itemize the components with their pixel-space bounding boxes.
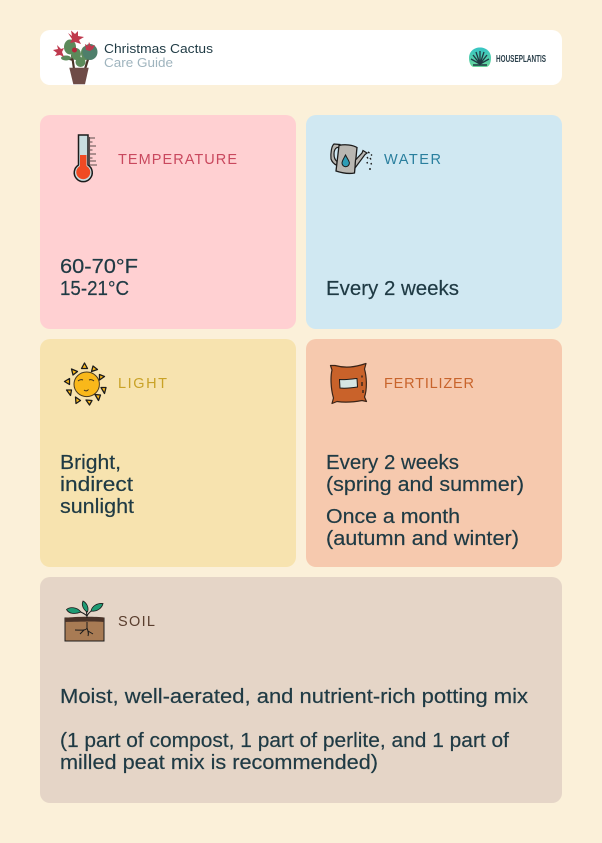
icon: watering can xyxy=(331,144,372,173)
heading: soil: SOIL xyxy=(118,614,155,630)
text: fertilizing schedule: (spring and summer) xyxy=(326,474,524,496)
header bar xyxy=(40,30,562,85)
text: light needs xyxy=(60,452,134,518)
title: Christmas Cactus xyxy=(104,41,214,56)
text: fertilizing schedule: Every 2 weeks xyxy=(326,452,459,474)
panel: light xyxy=(40,339,296,567)
icon: thermometer xyxy=(74,135,97,182)
heading: light: LIGHT xyxy=(118,376,167,392)
heading: water: WATER xyxy=(384,152,441,168)
text: light needs: indirect xyxy=(60,474,133,496)
text: soil mix: Moist, well-aerated, and nutrient-rich potting mix xyxy=(60,686,528,708)
text: soil mix xyxy=(60,686,528,774)
panel: soil xyxy=(40,577,562,803)
icon: christmas cactus in pot xyxy=(53,30,98,84)
text: soil mix: milled peat mix is recommended) xyxy=(60,752,378,774)
icon: sun xyxy=(64,363,106,405)
text: watering frequency: Every 2 weeks xyxy=(326,278,459,300)
text: fertilizing schedule xyxy=(326,452,524,550)
text: light needs: Bright, xyxy=(60,452,121,474)
text: fertilizing schedule: Once a month xyxy=(326,506,460,528)
subtitle: Care Guide xyxy=(104,55,173,70)
text: light needs: sunlight xyxy=(60,496,134,518)
panel: fertilizer xyxy=(306,339,562,567)
heading: fertilizer: FERTILIZER xyxy=(384,376,474,392)
text: temperature range xyxy=(60,256,138,300)
icon: seedling in soil xyxy=(65,601,104,641)
text: soil mix: (1 part of compost, 1 part of perlite, and 1 part of xyxy=(60,730,509,752)
text: temperature range: 60-70°F xyxy=(60,256,138,278)
logo wordmark: HOUSEPLANTIS xyxy=(496,53,546,65)
panel: temperature xyxy=(40,115,296,329)
logo icon xyxy=(469,48,491,67)
text: temperature range: 15-21°C xyxy=(60,278,129,300)
text: fertilizing schedule: (autumn and winter) xyxy=(326,528,519,550)
panel: water xyxy=(306,115,562,329)
icon: fertilizer bag xyxy=(330,364,366,404)
heading: temperature: TEMPERATURE xyxy=(118,152,237,168)
